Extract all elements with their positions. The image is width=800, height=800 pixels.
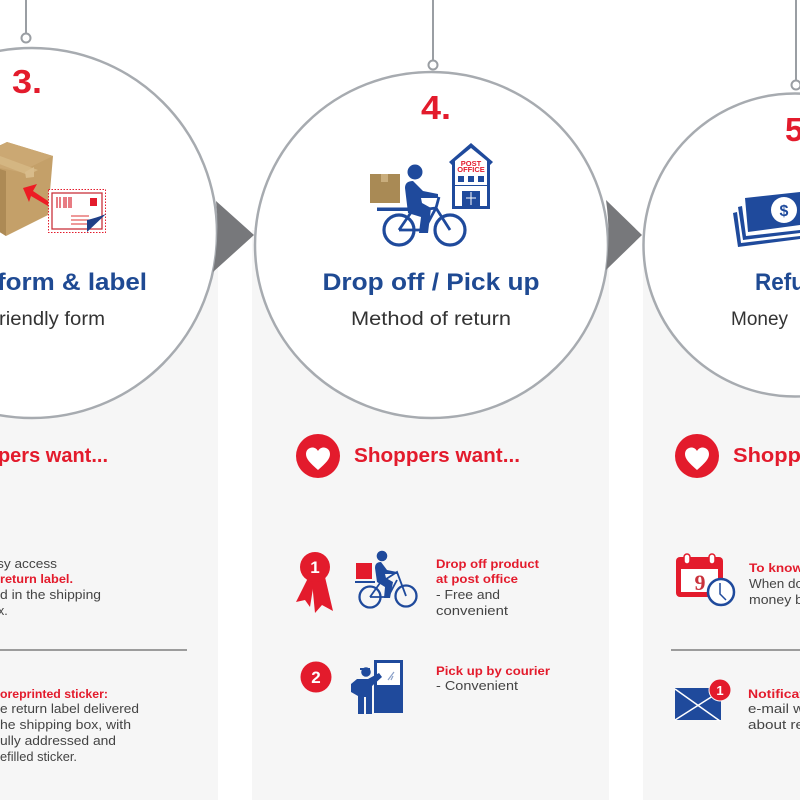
panel: step 5 background bbox=[643, 230, 800, 800]
icon: number 2 bbox=[300, 662, 332, 692]
text: drop off product: Drop off product bbox=[436, 557, 539, 571]
text: preprinted sticker: oreprinted sticker: bbox=[0, 687, 108, 701]
text: drop off product bbox=[436, 557, 539, 618]
icon: envelope with notification bbox=[675, 679, 731, 721]
panel: step 3 background bbox=[0, 230, 218, 800]
subheading: step 5: Money bbox=[731, 309, 789, 330]
text: to know: money b bbox=[749, 593, 800, 607]
text: notification: about re bbox=[748, 718, 800, 732]
hanger: step 3 bbox=[22, 0, 30, 42]
subheading: step 4: Method of return bbox=[351, 309, 511, 330]
text: pick up by courier: Pick up by courier bbox=[436, 664, 550, 678]
text: to know: When do bbox=[749, 577, 800, 591]
text: notification: Notificat bbox=[748, 687, 800, 701]
panel: step 4 background bbox=[252, 230, 609, 800]
icon: bicycle courier with post office: POST bbox=[461, 159, 482, 168]
text: notification bbox=[748, 687, 800, 732]
icon: calendar and clock bbox=[676, 554, 734, 605]
shoppers want: step 5: Shopp bbox=[733, 445, 800, 467]
number: 4: 4. bbox=[421, 89, 451, 126]
text: preprinted sticker: ully addressed and bbox=[0, 734, 116, 748]
text: pick up by courier bbox=[436, 664, 550, 693]
text: drop off product: convenient bbox=[436, 604, 509, 618]
text: pick up by courier: - Convenient bbox=[436, 679, 519, 693]
number: 3: 3. bbox=[12, 63, 42, 100]
icon: small bicycle courier bbox=[355, 551, 416, 608]
icon: heart badge bbox=[675, 434, 719, 478]
text: drop off product: - Free and bbox=[436, 588, 500, 602]
heading: step 3: form & label bbox=[0, 269, 147, 296]
text: preprinted sticker: e return label delivered bbox=[0, 702, 139, 716]
icon: banknotes: $ bbox=[780, 203, 789, 220]
icon: heart badge bbox=[296, 434, 340, 478]
hanger: step 4 bbox=[428, 0, 438, 70]
shoppers want: step 4: Shoppers want... bbox=[354, 445, 520, 467]
text: preprinted sticker: he shipping box, with bbox=[0, 718, 131, 732]
icon: banknotes bbox=[733, 192, 800, 247]
divider bbox=[671, 649, 800, 651]
circle: step 4 bbox=[255, 72, 608, 418]
icon: ribbon number 1: 1 bbox=[310, 558, 320, 577]
heading: step 4: Drop off / Pick up bbox=[322, 269, 540, 296]
divider bbox=[0, 649, 187, 651]
arrow: step 3 to 4 bbox=[213, 201, 254, 272]
hanger: step 5 bbox=[792, 0, 800, 90]
shoppers want: step 3: pers want... bbox=[0, 445, 108, 467]
text: return label: return label. bbox=[0, 572, 73, 586]
icon: courier at door bbox=[351, 660, 403, 714]
text: notification: e-mail w bbox=[748, 702, 800, 716]
circle: step 3 bbox=[0, 48, 217, 418]
arrow: step 4 to 5 bbox=[606, 200, 642, 270]
icon: calendar and clock: 9 bbox=[694, 570, 706, 595]
subheading: step 3: riendly form bbox=[0, 309, 105, 330]
icon: ribbon number 1 bbox=[296, 552, 333, 613]
text: preprinted sticker: efilled sticker. bbox=[0, 750, 77, 764]
icon: number 2: 2 bbox=[311, 668, 321, 687]
icon: bicycle courier with post office: OFFICE bbox=[457, 165, 485, 174]
icon: parcel box with label bbox=[0, 142, 106, 236]
icon: envelope with notification: 1 bbox=[716, 683, 724, 698]
text: return label: d in the shipping bbox=[0, 588, 101, 602]
text: drop off product: at post office bbox=[436, 572, 518, 586]
text: to know bbox=[749, 561, 800, 607]
circle: step 5 bbox=[644, 94, 800, 396]
text: preprinted sticker bbox=[0, 687, 139, 764]
icon: bicycle courier with post office bbox=[370, 143, 493, 245]
text: to know: To know bbox=[749, 561, 800, 575]
text: return label bbox=[0, 557, 101, 618]
